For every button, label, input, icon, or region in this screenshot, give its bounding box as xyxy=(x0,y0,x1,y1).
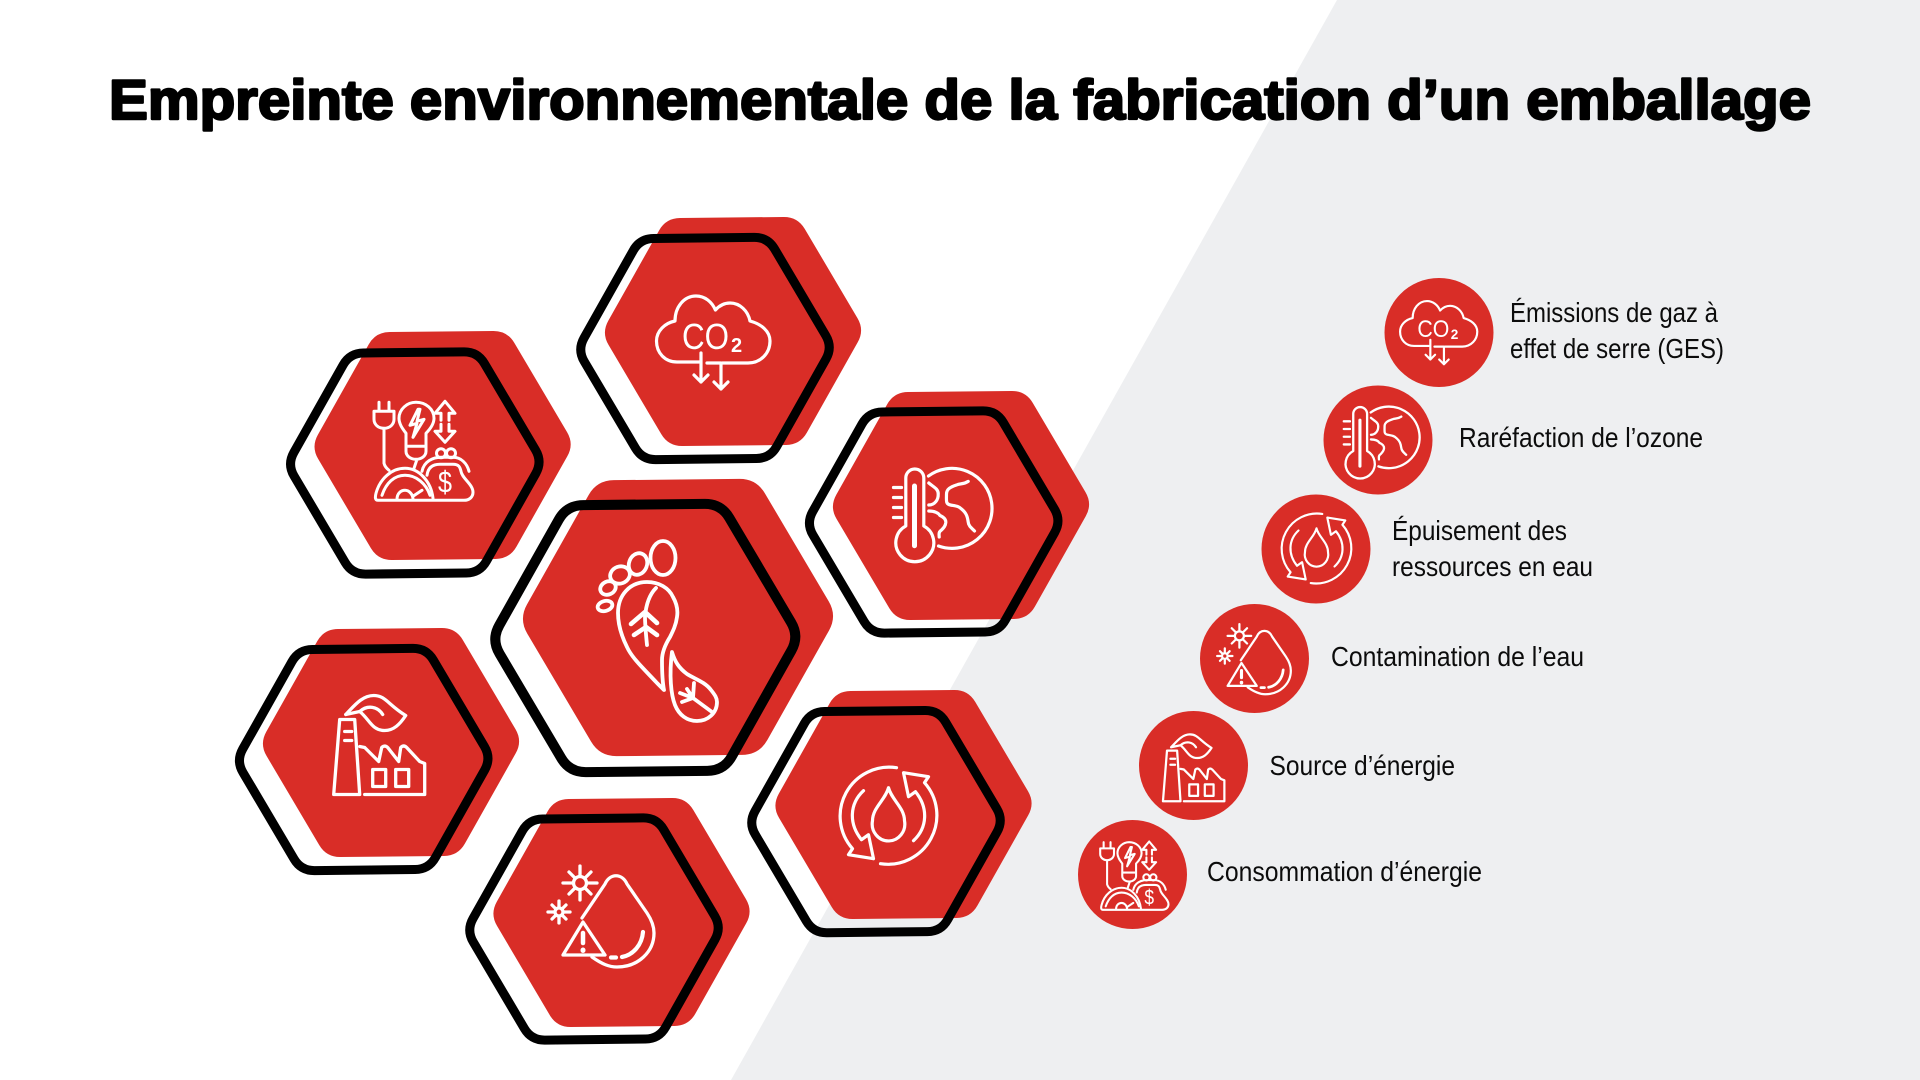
hexagon: greenhouse gas CO2 xyxy=(580,216,862,460)
icon: thermometer and earth xyxy=(894,468,992,562)
hexagon: ozone depletion xyxy=(808,390,1090,634)
small icon: green factory xyxy=(1163,734,1224,801)
legend item: ozone depletion xyxy=(1324,386,1703,494)
label: water depletion: ressources en eau xyxy=(1392,551,1593,582)
icon: CO2 cloud xyxy=(656,296,770,389)
icon: leaf footprint xyxy=(596,541,717,721)
label: water contamination: Contamination de l’eau xyxy=(1331,641,1584,672)
title: Empreinte environnementale de la fabrication d’un emballage xyxy=(109,68,1811,131)
small icon: thermometer and earth xyxy=(1344,407,1420,478)
small icon: energy plug bulb purse gauge xyxy=(1100,842,1168,910)
label: energy source: Source d’énergie xyxy=(1270,750,1455,781)
label: water depletion: Épuisement des xyxy=(1392,515,1567,546)
legend item: water depletion xyxy=(1262,494,1593,604)
icon: water drop cycle xyxy=(840,767,937,864)
legend item: water contamination xyxy=(1200,604,1584,713)
icon: CO2 cloud: CO xyxy=(682,316,729,357)
label: GHG emissions: effet de serre (GES) xyxy=(1510,333,1724,364)
icon: contaminated water drop xyxy=(548,866,654,967)
icon: CO2 cloud: 2 xyxy=(731,335,742,357)
icon: energy plug bulb purse gauge xyxy=(374,401,473,500)
hexagon: central footprint xyxy=(494,478,835,773)
legend item: GHG emissions xyxy=(1384,278,1724,387)
label: ozone depletion: Raréfaction de l’ozone xyxy=(1459,422,1703,453)
label: energy consumption: Consommation d’énergie xyxy=(1207,856,1482,887)
icon: energy plug bulb purse gauge: $ xyxy=(438,464,452,499)
hexagon: energy consumption xyxy=(289,330,572,575)
hexagon: energy source factory xyxy=(238,627,520,871)
hexagon: water resource depletion xyxy=(751,689,1033,933)
legend item: energy consumption xyxy=(1078,820,1482,929)
small icon: CO2 cloud: 2 xyxy=(1451,327,1459,342)
small icon: energy plug bulb purse gauge: $ xyxy=(1144,885,1154,909)
small icon: CO2 cloud xyxy=(1400,301,1477,364)
hexagon: water contamination xyxy=(469,797,751,1041)
background diagonal grey panel xyxy=(731,0,1920,1080)
legend item: energy source xyxy=(1139,711,1455,820)
label: GHG emissions: Émissions de gaz à xyxy=(1510,297,1719,328)
small icon: contaminated water drop xyxy=(1217,624,1291,694)
small icon: CO2 cloud: CO xyxy=(1417,316,1449,343)
icon: green factory xyxy=(334,696,425,794)
small icon: water drop cycle xyxy=(1282,514,1351,583)
